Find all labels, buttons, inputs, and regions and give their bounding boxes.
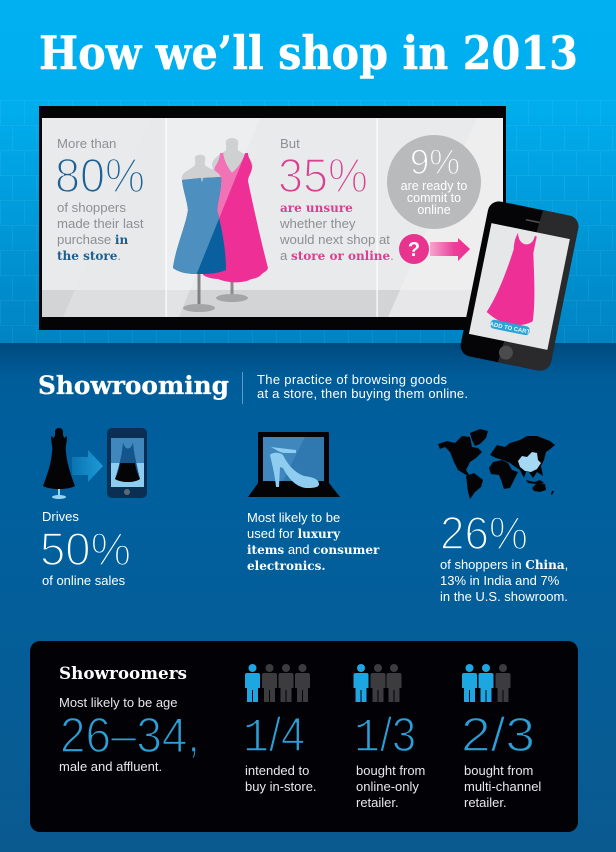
arrow: question to phone [430,238,470,261]
callout: 9 percent circle: commit to [407,191,461,205]
text block: 26 percent in China [440,507,568,604]
icon: question mark: ? [408,239,420,261]
icon: dress to phone [43,428,147,499]
callout: 9 percent circle [387,135,481,229]
text block: one third: 1/3 [354,709,416,766]
chart: world map with China highlighted [438,429,555,499]
text block: 26 percent in China: 26% [440,507,528,559]
text block: 35 percent unsure: whether they [279,216,356,231]
text block: luxury and electronics [247,510,380,573]
text block: two thirds: 2/3 [461,709,535,762]
text block: 80 percent in store [55,136,145,263]
text block: one third [354,709,425,810]
text block: luxury and electronics: electronics. [247,559,326,573]
callout: 9 percent circle: 9% [410,143,460,182]
icon: question mark [399,234,429,264]
text block: definition: The practice of browsing goods [257,372,448,387]
text block: age group: Most likely to be age [59,695,178,710]
text block: 80 percent in store: made their last [57,216,144,231]
text block: 35 percent unsure: But [280,136,300,151]
text block: one quarter: intended to [245,763,309,778]
text block: drives 50 percent [40,509,131,588]
text block: luxury and electronics: used for luxury [247,526,341,541]
text block: one third: bought from [356,763,425,778]
icons: people one of three [354,664,402,702]
text block: age group [59,695,200,774]
text block: 26 percent in China: in the U.S. showroom. [440,589,568,604]
panel: store window monitor [39,106,506,330]
heading: Showrooming: Showrooming [38,371,229,400]
text block: one quarter: 1/4 [243,709,305,766]
text block: two thirds: multi-channel [464,779,541,794]
text block: one quarter: buy in-store. [245,779,317,794]
divider [242,372,243,404]
text block: 80 percent in store: More than [57,136,116,151]
text block: 26 percent in China: 13% in India and 7% [440,573,560,588]
text block: luxury and electronics: items and consumer [247,542,380,557]
text block: drives 50 percent: of online sales [42,573,126,588]
text block: 35 percent unsure [278,136,394,263]
text block: definition: at a store, then buying them online. [257,386,468,401]
icon: laptop with shoe [248,432,340,497]
background: upper blue band [0,0,616,343]
icon: phone with dress [459,199,580,373]
icon: phone with dress: ADD TO CART [489,322,531,336]
background: brick pattern [0,100,616,343]
heading: Showroomers: Showroomers [59,664,187,683]
icons: people one of four [245,664,310,702]
text block: one third: online-only [356,779,419,794]
text block: age group: 26–34, [60,709,200,763]
callout: 9 percent circle: online [417,203,451,217]
text block: one quarter [243,709,317,794]
text block: 35 percent unsure: are unsure [280,201,353,215]
panel: showroomers [30,641,578,832]
text block: 80 percent in store: the store. [57,248,121,263]
text block: 35 percent unsure: would next shop at [279,232,390,247]
text block: 35 percent unsure: a store or online. [280,248,394,263]
text block: two thirds [461,709,541,810]
text block: two thirds: bought from [464,763,533,778]
text block: 26 percent in China: of shoppers in China, [440,557,568,572]
text block: one third: retailer. [356,795,399,810]
text block: 80 percent in store: purchase in [57,232,128,247]
text block: 80 percent in store: of shoppers [57,200,126,215]
text block: 35 percent unsure: 35% [278,150,368,203]
text block: age group: male and affluent. [59,759,162,774]
text block: definition [257,372,468,401]
text block: drives 50 percent: 50% [40,523,131,575]
text block: drives 50 percent: Drives [42,509,79,524]
text block: 80 percent in store: 80% [55,150,145,203]
background: lower dark blue section [0,343,616,852]
icons: people two of three [462,664,510,702]
text block: two thirds: retailer. [464,795,507,810]
callout: 9 percent circle: are ready to [401,179,467,193]
illustration: two dresses on mannequins [173,138,268,312]
text block: luxury and electronics: Most likely to be [247,510,340,525]
